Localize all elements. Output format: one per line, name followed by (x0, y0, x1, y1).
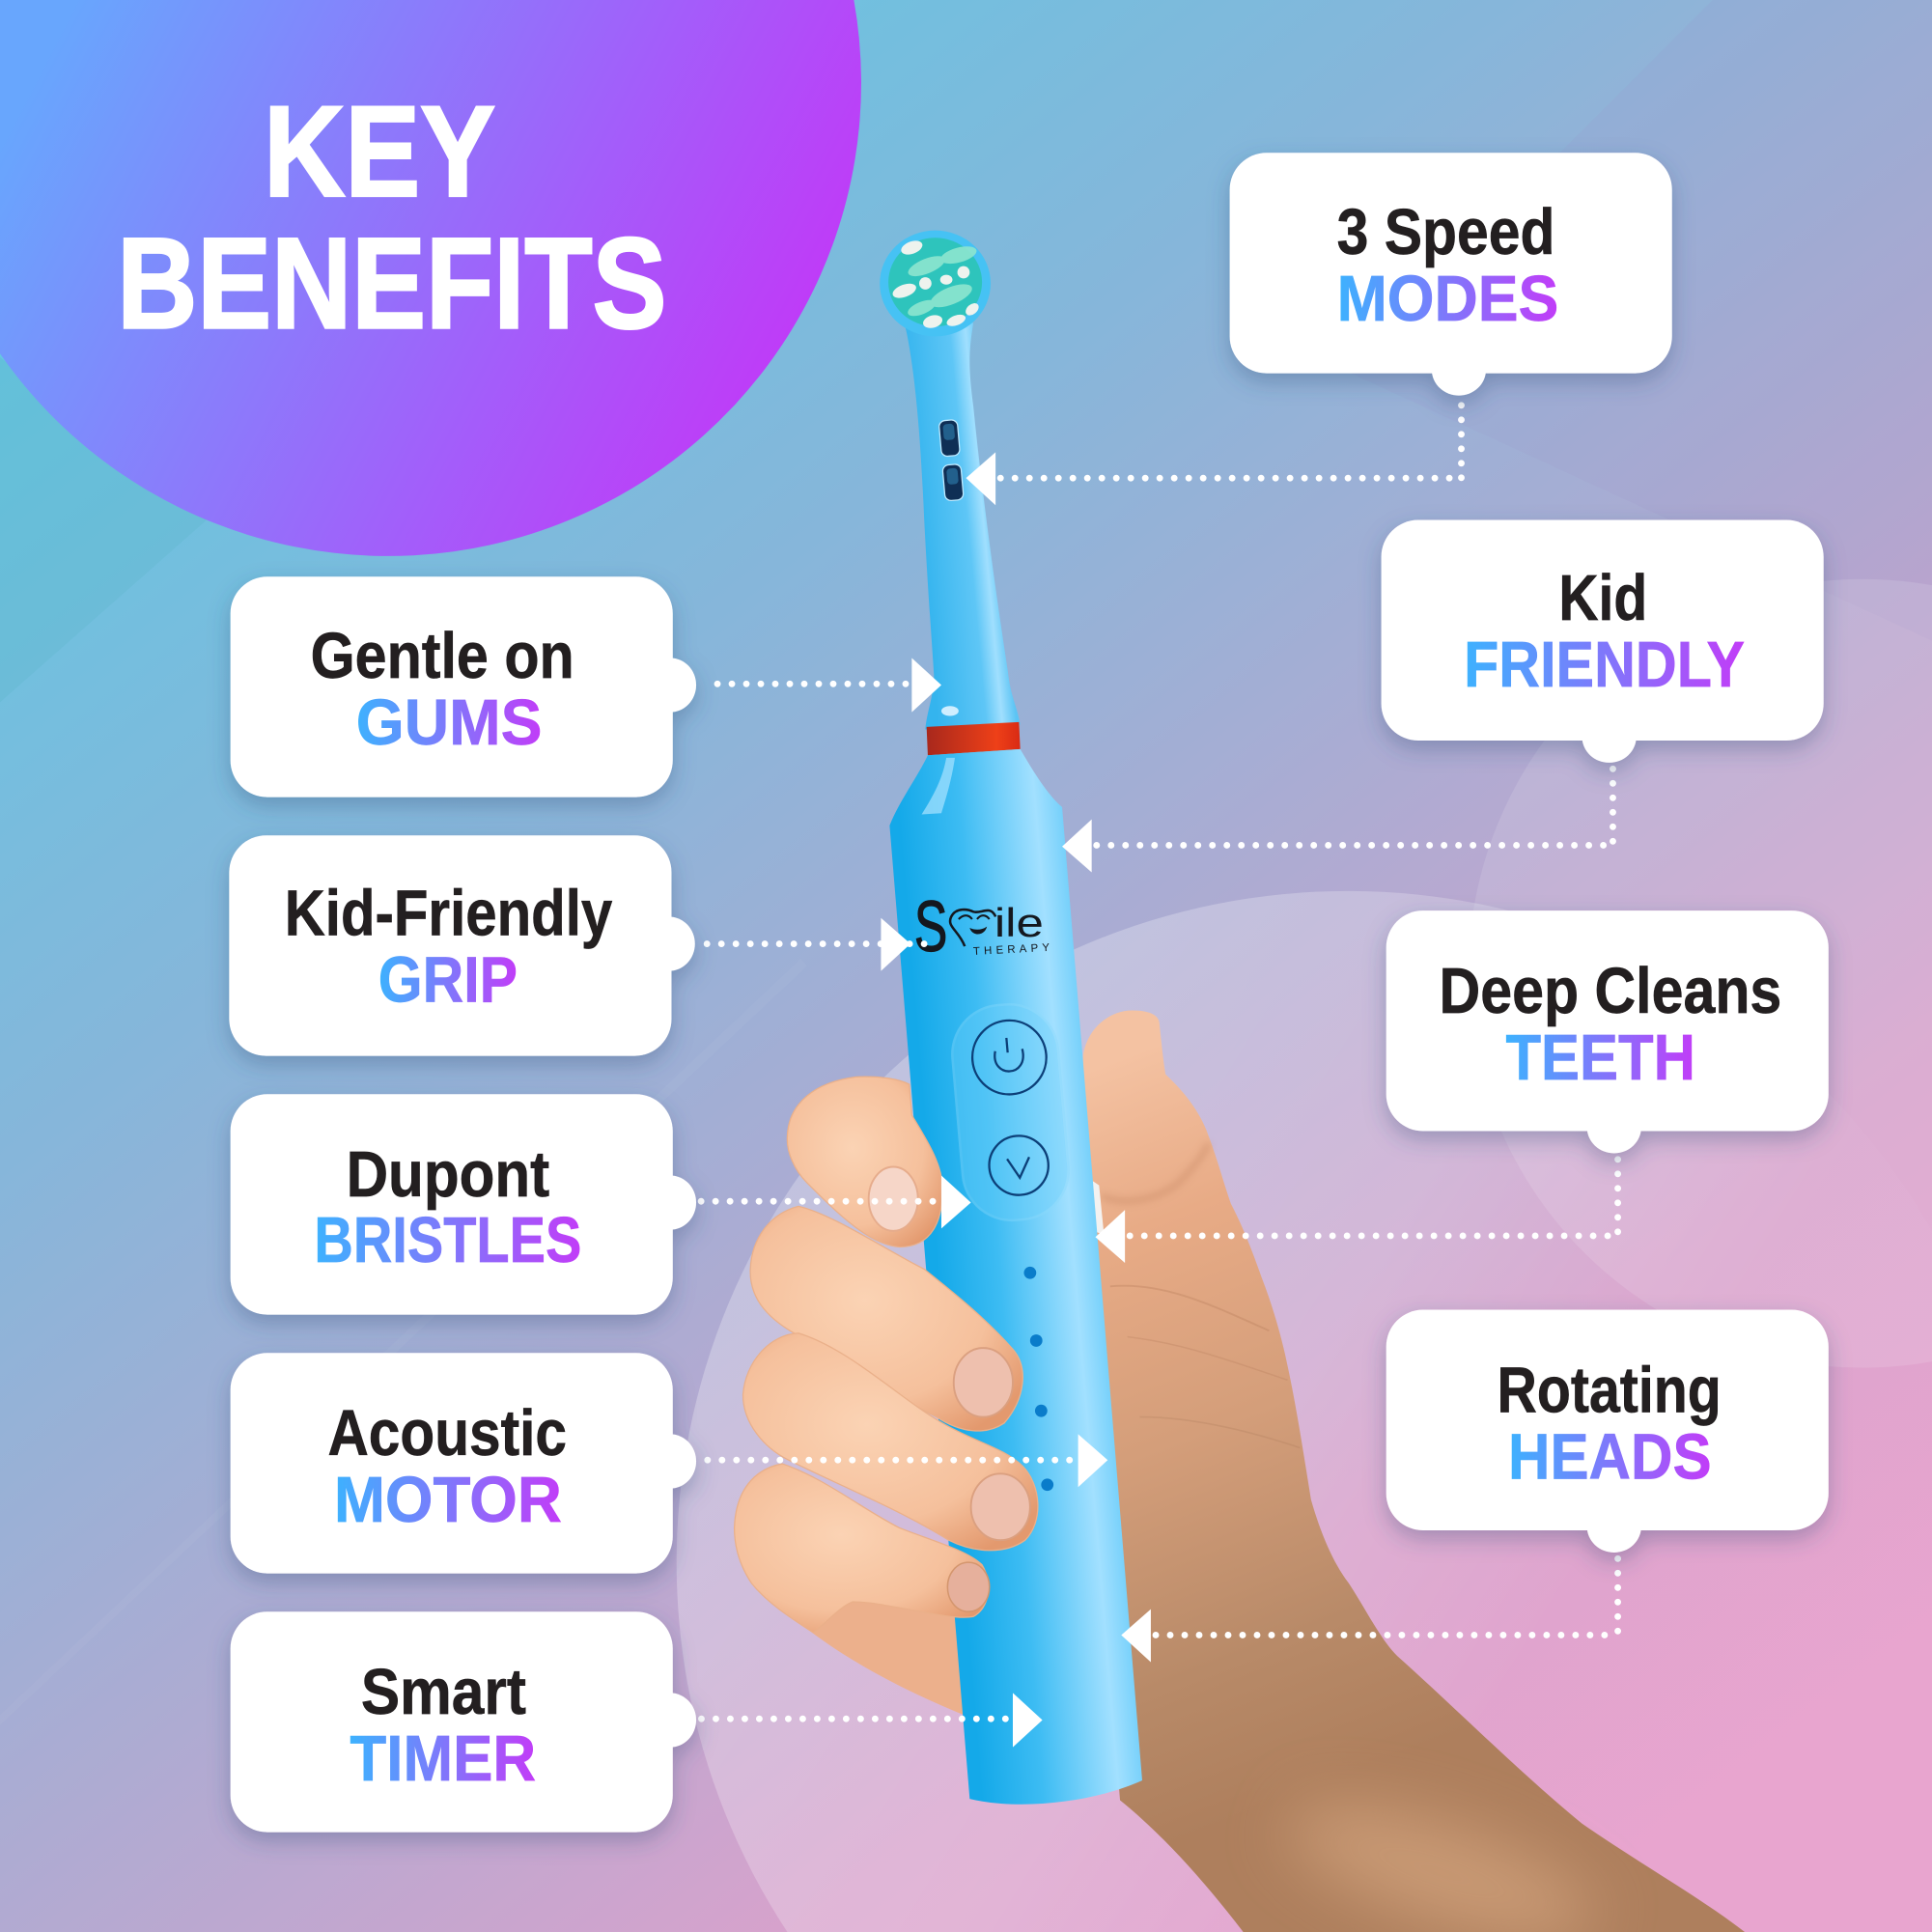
finger: little (735, 1464, 990, 1633)
red collar (927, 722, 1021, 755)
title: BENEFITS (117, 211, 666, 355)
finger: index (787, 1077, 942, 1246)
card: kid friendly: FRIENDLY (1464, 629, 1745, 701)
card: kid friendly: Kid (1558, 562, 1647, 634)
card: kid-friendly grip (229, 835, 695, 1056)
card: kid-friendly grip: GRIP (378, 944, 518, 1017)
card: gentle on gums: GUMS (356, 686, 543, 759)
card: deep cleans teeth: Deep Cleans (1440, 955, 1781, 1027)
connector: gums (706, 658, 941, 713)
card: gentle on gums (231, 576, 696, 798)
button panel (948, 1000, 1073, 1224)
brush neck (905, 322, 1021, 729)
connector: friendly (1062, 769, 1612, 873)
card: smart timer: Smart (361, 1656, 526, 1728)
card: gentle on gums: Gentle on (311, 620, 574, 692)
title circle (0, 0, 861, 556)
card: 3 speed modes (1230, 153, 1672, 396)
card: rotating heads: Rotating (1498, 1354, 1722, 1426)
LED dots (1023, 1267, 1053, 1491)
card: deep cleans teeth (1386, 910, 1829, 1153)
card: rotating heads: HEADS (1508, 1420, 1712, 1493)
title (117, 80, 666, 355)
connector: timer (700, 1693, 1043, 1748)
card: smart timer (231, 1611, 696, 1833)
card: deep cleans teeth: TEETH (1505, 1022, 1695, 1094)
thumb sliver of light (1092, 1181, 1104, 1235)
collar highlight (941, 706, 959, 715)
toothbrush (880, 231, 1142, 1805)
card: dupont bristles: BRISTLES (314, 1204, 581, 1276)
connector: heads (1121, 1558, 1618, 1663)
card: acoustic motor: Acoustic (327, 1397, 567, 1470)
title: KEY (264, 80, 495, 224)
card: 3 speed modes: MODES (1337, 263, 1558, 335)
connector: motor (706, 1434, 1107, 1487)
card: smart timer: TIMER (350, 1722, 536, 1795)
card: 3 speed modes: 3 Speed (1337, 196, 1554, 268)
brush head with bristles (880, 231, 991, 336)
logo: S (914, 886, 947, 966)
card: kid-friendly grip: Kid-Friendly (285, 878, 612, 950)
handle (889, 749, 1142, 1805)
logo: ile (994, 900, 1044, 945)
card: rotating heads (1386, 1310, 1829, 1553)
logo (914, 886, 1050, 966)
mode button (987, 1134, 1050, 1197)
logo: THERAPY (973, 942, 1050, 958)
card: acoustic motor (231, 1353, 696, 1574)
fingers (735, 1077, 1038, 1633)
finger: ring (743, 1333, 1038, 1551)
connector: bristles (700, 1175, 971, 1228)
connector: modes (966, 406, 1462, 505)
shoulder highlight (922, 758, 955, 815)
card: dupont bristles (231, 1094, 696, 1315)
card: acoustic motor: MOTOR (334, 1464, 562, 1536)
card: kid friendly (1382, 520, 1824, 763)
card: dupont bristles: Dupont (347, 1138, 549, 1211)
power button (969, 1018, 1050, 1098)
connector: grip (697, 918, 924, 971)
connector: teeth (1095, 1160, 1618, 1263)
hand palm and thumb (800, 1010, 1745, 1932)
vent windows (938, 419, 964, 501)
finger: middle (750, 1206, 1022, 1431)
